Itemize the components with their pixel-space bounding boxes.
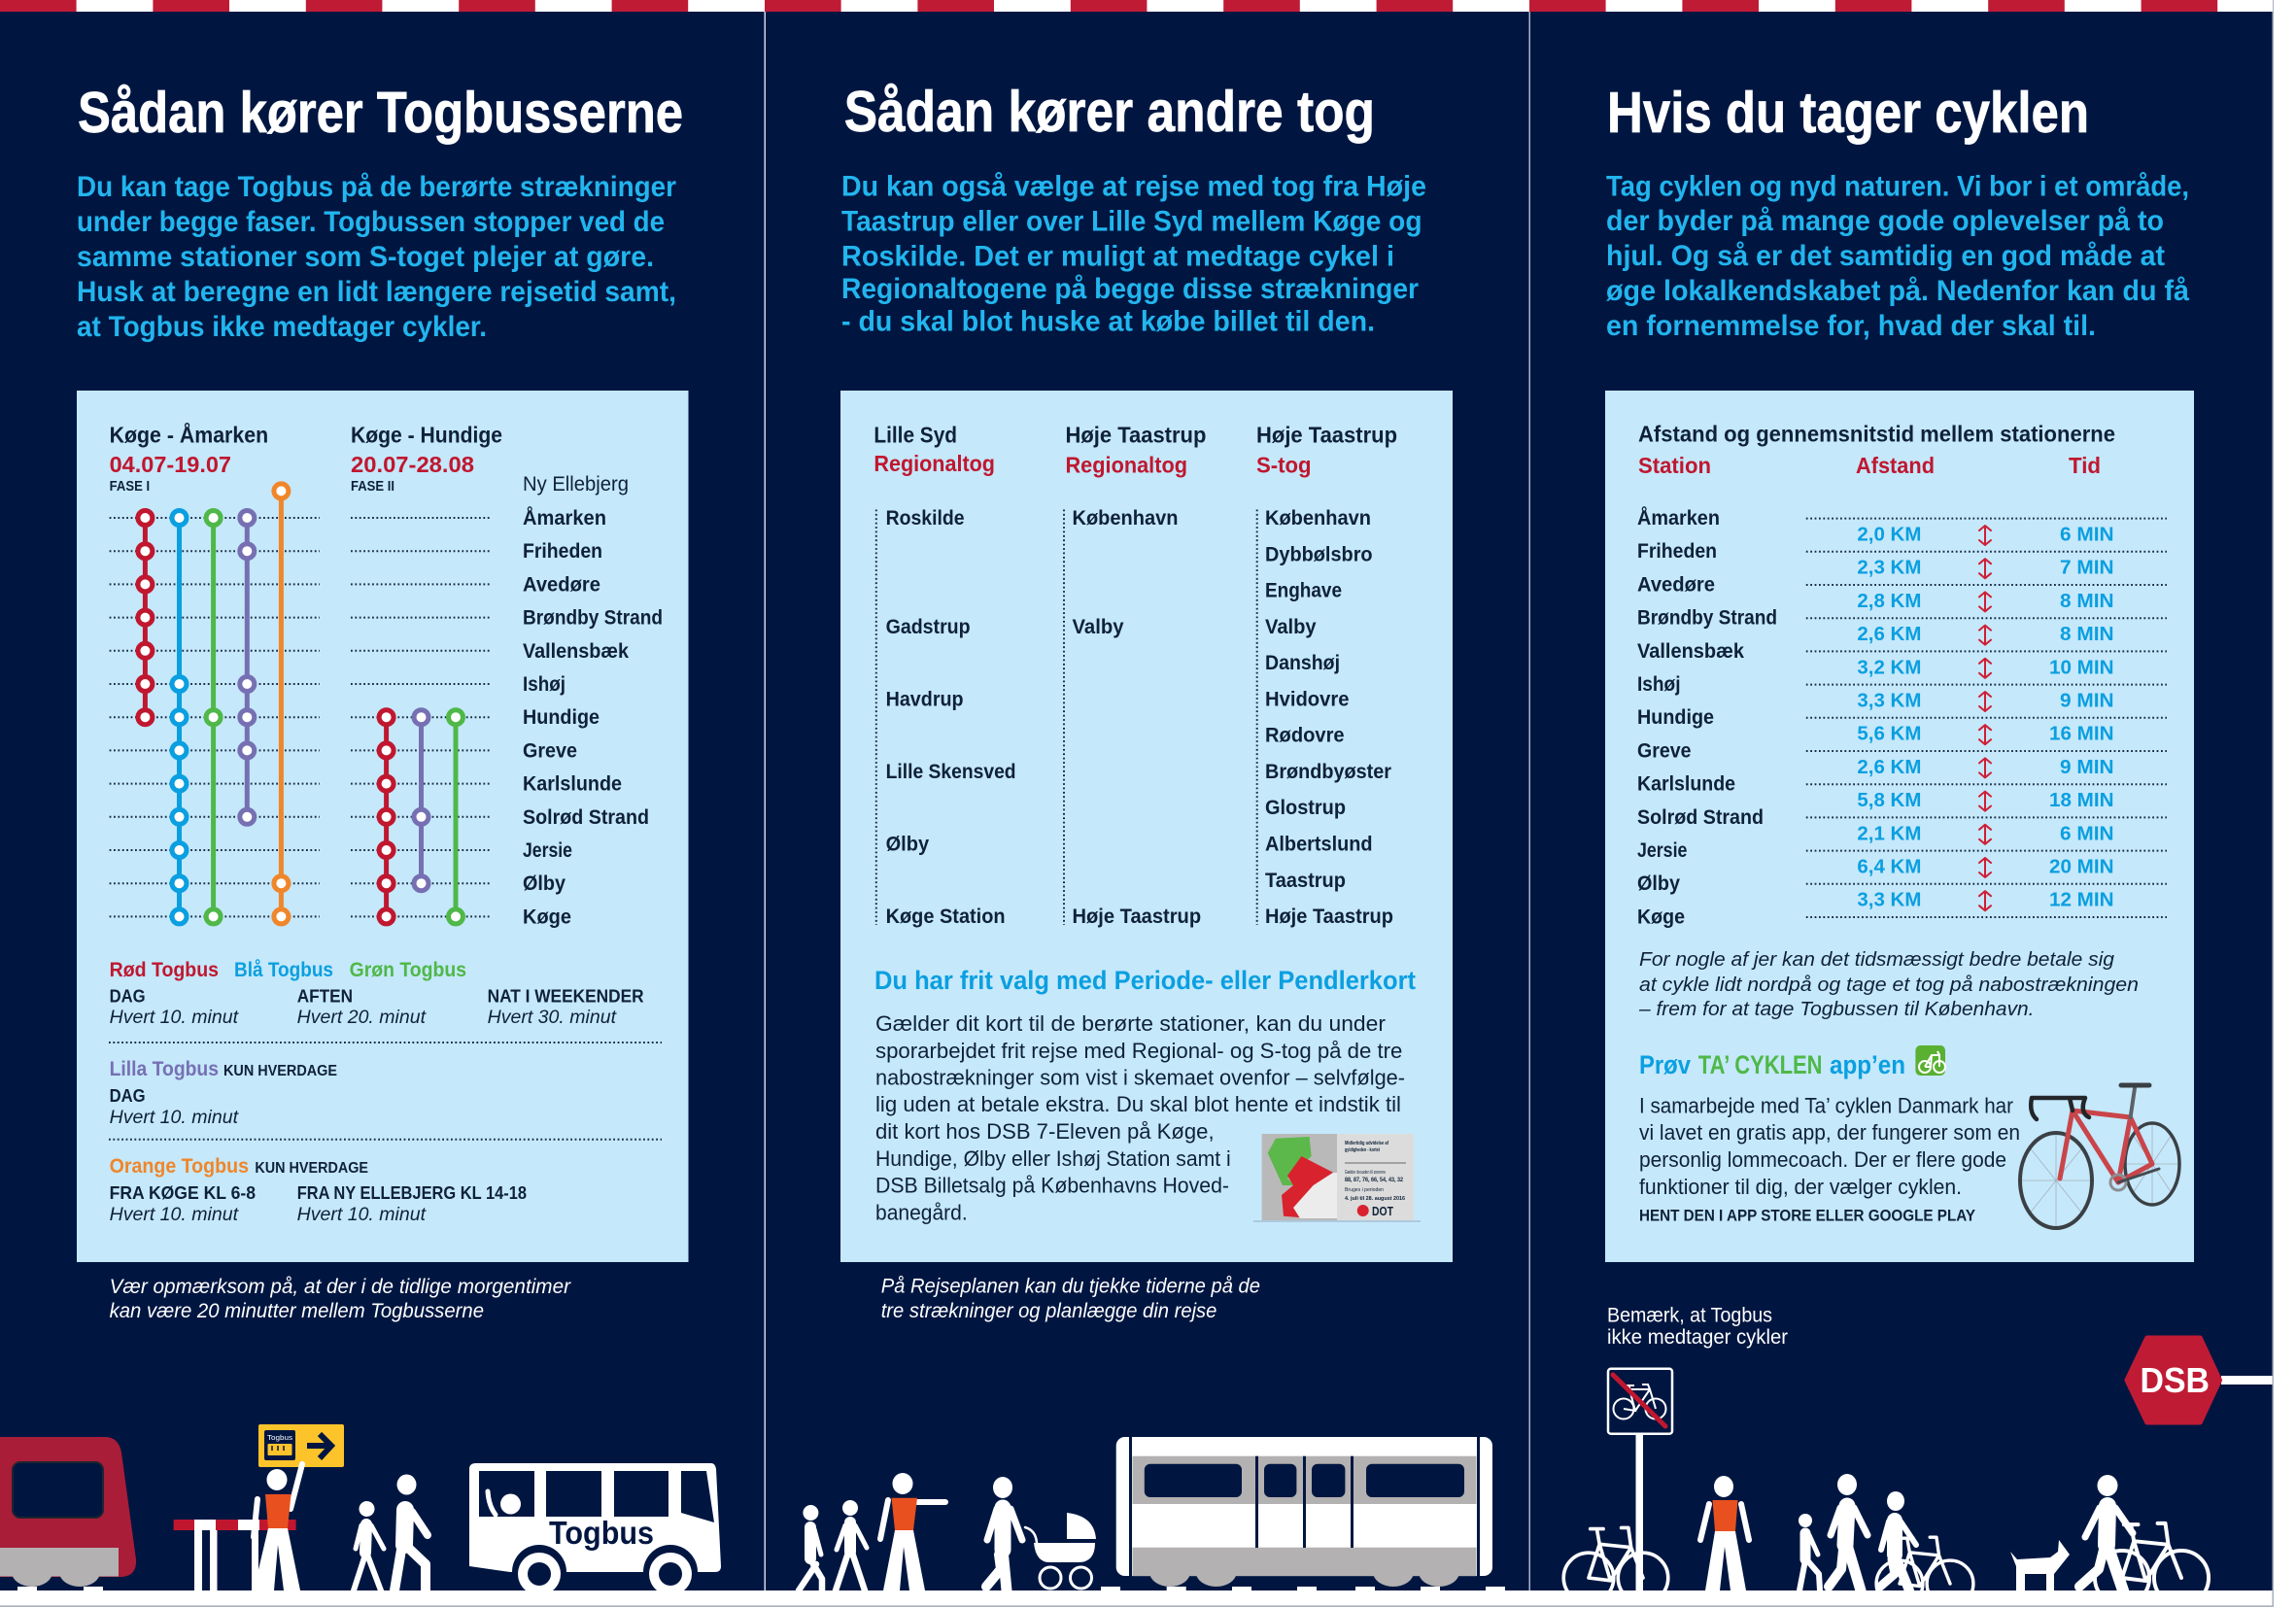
station names: Avedøre xyxy=(523,573,600,596)
legend: purple Togbus: DAG xyxy=(110,1086,146,1106)
note: early morning departures: kan være 20 minutter mellem Togbusserne xyxy=(110,1300,484,1322)
route headings: 20.07-28.08 xyxy=(351,452,474,477)
legend: orange Togbus: FRA NY ELLEBJERG KL 14-18 xyxy=(297,1183,527,1203)
image: commuter card insert with zone map xyxy=(1253,1134,1421,1222)
route headings xyxy=(110,422,502,495)
distance values: 2,3 KM xyxy=(1857,558,1921,579)
time values: 18 MIN xyxy=(2049,790,2114,811)
time values: 6 MIN xyxy=(2060,823,2114,844)
station column: Karlslunde xyxy=(1637,773,1735,796)
intro text: panel 2: Du kan også vælge at rejse med tog fra Høje xyxy=(841,171,1426,203)
station column: Solrød Strand xyxy=(1637,806,1764,829)
Høje Taastrup S-tog stations: Enghave xyxy=(1265,579,1342,602)
legend: orange Togbus: Hvert 10. minut xyxy=(110,1205,239,1225)
distance values: 2,6 KM xyxy=(1857,624,1921,645)
purple line phase II xyxy=(414,710,428,891)
station column: Køge xyxy=(1637,906,1685,928)
top stripe: red and white rail pattern xyxy=(0,0,2273,12)
image: commuter card insert with zone map: Gælder desuden til zonerne xyxy=(1345,1170,1386,1176)
station names: Ølby xyxy=(523,872,565,895)
subheading: Periode- eller Pendlerkort: Du har frit valg med Periode- eller Pendlerkort xyxy=(874,966,1416,995)
figure: guide in vest pointing at sign xyxy=(254,1464,302,1590)
intro text: panel 1 xyxy=(77,171,676,343)
distance values: 3,3 KM xyxy=(1857,890,1921,911)
Høje Taastrup S-tog stations: København xyxy=(1265,507,1371,530)
image: commuter card insert with zone map: Midlertidig udvidelse af xyxy=(1345,1141,1388,1146)
Lille Syd regional stations: Roskilde xyxy=(886,507,965,530)
intro text: panel 2: Roskilde. Det er muligt at medtage cykel i xyxy=(841,240,1394,272)
illustration: Togbus bus: Togbus xyxy=(549,1515,654,1551)
station column: Hundige xyxy=(1637,706,1714,729)
column headers xyxy=(874,422,1397,478)
note: early morning departures xyxy=(110,1276,571,1322)
panel: cycling distances xyxy=(1605,391,2194,1262)
station column: Ishøj xyxy=(1637,673,1681,696)
green line phase I xyxy=(206,511,221,924)
image: commuter card insert with zone map: 4. juli til 28. august 2016 xyxy=(1345,1196,1405,1202)
Høje Taastrup S-tog stations: Albertslund xyxy=(1265,834,1373,855)
green line phase II xyxy=(449,710,463,924)
time values: 9 MIN xyxy=(2060,757,2114,778)
column headers: Lille Syd xyxy=(874,422,957,447)
legend: red, blue and green Togbus: Hvert 30. minut xyxy=(488,1008,617,1028)
illustration: S-train carriage xyxy=(1101,1437,1505,1591)
body text: card information: dit kort hos DSB 7-Eleven på Køge, xyxy=(875,1119,1215,1144)
subheading: Prøv TA' CYKLEN app'en: TA’ CYKLEN xyxy=(1698,1050,1823,1079)
intro text: panel 3: en fornemmelse for, hvad der skal til. xyxy=(1606,310,2096,342)
body text: app description xyxy=(1639,1094,2020,1225)
column headers: S-tog xyxy=(1256,453,1312,478)
note: Rejseplanen: På Rejseplanen kan du tjekke tiderne på de xyxy=(881,1276,1260,1298)
Høje Taastrup regional stations: København xyxy=(1073,507,1178,530)
image: red road bicycle xyxy=(2018,1085,2179,1229)
legend: red, blue and green Togbus: DAG xyxy=(110,987,146,1007)
icon: no bicycles sign on pole with parked bike xyxy=(1563,1369,1672,1603)
image: commuter card insert with zone map: 88, 87, 76, 66, 54, 43, 32 xyxy=(1345,1178,1404,1183)
station names: Vallensbæk xyxy=(523,640,629,663)
route headings: FASE I xyxy=(110,479,150,495)
legend: red, blue and green Togbus: NAT I WEEKENDER xyxy=(488,987,644,1007)
legend: orange Togbus: Orange Togbus xyxy=(110,1154,249,1178)
figures: child and adult walking xyxy=(354,1475,428,1590)
italic cycling tip: For nogle af jer kan det tidsmæssigt bedre betale sig xyxy=(1639,949,2114,971)
italic cycling tip: at cykle lidt nordpå og tage et tog på nabostrækningen xyxy=(1639,974,2139,996)
body text: app description: funktioner til dig, der vælger cyklen. xyxy=(1639,1175,1962,1199)
figure: guide in vest pointing toward train xyxy=(880,1473,945,1590)
Høje Taastrup S-tog stations: Valby xyxy=(1265,616,1317,638)
time values: 12 MIN xyxy=(2049,890,2114,911)
station column: Brøndby Strand xyxy=(1637,607,1777,630)
italic cycling tip xyxy=(1638,949,2139,1020)
station names: Åmarken xyxy=(523,506,606,530)
distance values: 2,1 KM xyxy=(1857,823,1921,844)
route headings: Køge - Åmarken xyxy=(110,422,268,447)
distance values: 3,3 KM xyxy=(1857,690,1921,711)
italic cycling tip: – frem for at tage Togbussen til København. xyxy=(1638,999,2035,1020)
icon: Ta' cyklen app xyxy=(1915,1045,1945,1076)
Høje Taastrup S-tog stations: Taastrup xyxy=(1265,870,1346,892)
intro text: panel 2: Taastrup eller over Lille Syd mellem Køge og xyxy=(841,206,1422,238)
intro text: panel 1: samme stationer som S-toget plejer at gøre. xyxy=(77,241,654,273)
station column: Greve xyxy=(1637,739,1691,762)
intro text: panel 1: at Togbus ikke medtager cykler. xyxy=(77,311,487,343)
figures: family walking with bicycle xyxy=(1799,1474,1973,1607)
body text: card information: Hundige, Ølby eller Ishøj Station samt i xyxy=(875,1146,1231,1171)
legend: purple Togbus: KUN HVERDAGE xyxy=(223,1063,337,1079)
intro text: panel 3 xyxy=(1606,171,2190,342)
time values: 20 MIN xyxy=(2049,857,2114,878)
legend: red, blue and green Togbus: AFTEN xyxy=(297,987,353,1007)
note: Togbus does not carry bikes xyxy=(1607,1305,1788,1349)
intro text: panel 2: Regionaltogene på begge disse strækninger xyxy=(841,273,1419,305)
ground: white platform xyxy=(0,1590,2274,1607)
distance values: 5,6 KM xyxy=(1857,724,1921,745)
body text: app description: I samarbejde med Ta’ cyklen Danmark har xyxy=(1639,1094,2013,1118)
column headers: Regionaltog xyxy=(1065,453,1187,478)
image: commuter card insert with zone map: DOT xyxy=(1372,1204,1393,1218)
body text: card information: Gælder dit kort til de berørte stationer, kan du under xyxy=(875,1011,1386,1036)
station column: Avedøre xyxy=(1637,573,1715,596)
legend: red, blue and green Togbus: Hvert 20. minut xyxy=(297,1008,427,1028)
table rows dotted xyxy=(1806,519,2167,917)
body text: app description: HENT DEN I APP STORE ELLER GOOGLE PLAY xyxy=(1639,1208,1975,1225)
divider dots xyxy=(109,1043,662,1140)
distance values: 2,6 KM xyxy=(1857,757,1921,778)
panel: Togbus route map and schedule xyxy=(77,391,688,1262)
table heading: Station xyxy=(1638,453,1711,478)
vertical dotted route lines xyxy=(876,509,1257,925)
orange line phase I xyxy=(274,484,289,924)
legend: red, blue and green Togbus: Hvert 10. minut xyxy=(110,1008,239,1028)
route headings: 04.07-19.07 xyxy=(110,452,231,477)
subheading: Prøv TA' CYKLEN app'en: app’en xyxy=(1830,1050,1905,1079)
legend: purple Togbus: Hvert 10. minut xyxy=(110,1108,239,1128)
legend: purple Togbus xyxy=(110,1057,337,1128)
table heading: Tid xyxy=(2069,453,2101,478)
body text: card information: lig uden at betale ekstra. Du skal blot hente et indstik til xyxy=(875,1092,1401,1116)
logo: DSB xyxy=(2128,1339,2272,1422)
time values: 8 MIN xyxy=(2060,591,2114,612)
body text: card information: banegård. xyxy=(875,1200,968,1224)
time values: 8 MIN xyxy=(2060,624,2114,645)
table heading: Afstand xyxy=(1856,453,1935,478)
subheading: Prøv TA' CYKLEN app'en xyxy=(1639,1050,1905,1079)
Lille Syd regional stations: Gadstrup xyxy=(886,616,971,638)
station names: Køge xyxy=(523,906,571,928)
panel: alternative trains xyxy=(840,391,1453,1262)
Høje Taastrup S-tog stations: Danshøj xyxy=(1265,652,1340,674)
illustration: red train xyxy=(0,1437,136,1591)
route headings: FASE II xyxy=(351,479,394,495)
intro text: panel 3: Tag cyklen og nyd naturen. Vi bor i et område, xyxy=(1606,171,2189,203)
column headers: Høje Taastrup xyxy=(1256,422,1397,447)
station column: Åmarken xyxy=(1637,506,1720,530)
station names xyxy=(523,473,663,928)
table heading xyxy=(1638,422,2115,478)
Lille Syd regional stations: Lille Skensved xyxy=(886,761,1016,783)
intro text: panel 1: Husk at beregne en lidt længere rejsetid samt, xyxy=(77,276,676,308)
legend: red, blue and green Togbus xyxy=(110,958,644,1028)
heading: Sådan kører Togbusserne: Sådan kører Togbusserne xyxy=(78,81,683,145)
figure: guide in vest xyxy=(1700,1476,1749,1590)
logo: DSB: DSB xyxy=(2140,1360,2210,1400)
Høje Taastrup regional stations: Høje Taastrup xyxy=(1073,906,1201,928)
body text: card information xyxy=(875,1011,1405,1224)
station names: Brøndby Strand xyxy=(523,607,663,630)
Lille Syd regional stations: Køge Station xyxy=(886,906,1006,928)
route lines: phase I xyxy=(138,484,289,924)
legend: orange Togbus: FRA KØGE KL 6-8 xyxy=(110,1183,256,1203)
heading: Sådan kører andre tog: Sådan kører andre tog xyxy=(844,80,1375,144)
red line phase II xyxy=(379,710,394,924)
table heading: Afstand og gennemsnitstid mellem stationerne xyxy=(1638,422,2115,447)
body text: card information: DSB Billetsalg på Københavns Hoved- xyxy=(875,1174,1229,1198)
distance values: 2,0 KM xyxy=(1857,525,1921,546)
intro text: panel 2: - du skal blot huske at købe billet til den. xyxy=(841,306,1375,338)
station column: Ølby xyxy=(1637,872,1680,895)
time values: 7 MIN xyxy=(2060,558,2114,579)
legend: red, blue and green Togbus: Grøn Togbus xyxy=(350,958,466,981)
legend: red, blue and green Togbus: Rød Togbus xyxy=(110,958,219,981)
intro text: panel 3: øge lokalkendskabet på. Nedenfor kan du få xyxy=(1606,275,2190,307)
legend: orange Togbus: KUN HVERDAGE xyxy=(255,1160,368,1177)
figure: dog xyxy=(2010,1540,2070,1590)
station names: Ishøj xyxy=(523,673,565,696)
figure: parent with pram xyxy=(986,1477,1096,1590)
Høje Taastrup S-tog stations: Høje Taastrup xyxy=(1265,906,1393,928)
station column xyxy=(1637,506,1777,928)
route headings: Køge - Hundige xyxy=(351,422,502,447)
Høje Taastrup S-tog stations: Brøndbyøster xyxy=(1265,761,1391,783)
Høje Taastrup regional stations xyxy=(1073,507,1201,928)
legend: orange Togbus: Hvert 10. minut xyxy=(297,1205,427,1225)
note: Togbus does not carry bikes: ikke medtager cykler xyxy=(1607,1326,1788,1349)
blue line phase I xyxy=(172,511,187,924)
note: early morning departures: Vær opmærksom på, at der i de tidlige morgentimer xyxy=(110,1276,571,1298)
station names: Greve xyxy=(523,739,577,762)
Høje Taastrup S-tog stations: Dybbølsbro xyxy=(1265,543,1373,565)
station column: Vallensbæk xyxy=(1637,640,1744,663)
distance values: 6,4 KM xyxy=(1857,857,1921,878)
note: Rejseplanen xyxy=(881,1276,1260,1322)
station names: Ny Ellebjerg xyxy=(523,473,629,496)
intro text: panel 2 xyxy=(841,171,1426,338)
body text: card information: nabostrækninger som vist i skemaet ovenfor – selvfølge- xyxy=(875,1066,1405,1090)
illustration: Togbus bus xyxy=(469,1463,721,1599)
purple line phase I xyxy=(240,511,255,824)
legend: red, blue and green Togbus: Blå Togbus xyxy=(234,958,333,981)
Høje Taastrup S-tog stations: Rødovre xyxy=(1265,725,1345,747)
distance values xyxy=(1857,525,1921,911)
time values: 9 MIN xyxy=(2060,690,2114,711)
body text: app description: vi lavet en gratis app, der fungerer som en xyxy=(1639,1120,2020,1145)
column headers: Regionaltog xyxy=(874,451,995,476)
intro text: panel 1: Du kan tage Togbus på de berørte strækninger xyxy=(77,171,676,203)
Høje Taastrup S-tog stations xyxy=(1265,507,1393,928)
red line phase I xyxy=(138,511,153,725)
note: Togbus does not carry bikes: Bemærk, at Togbus xyxy=(1607,1305,1772,1327)
intro text: panel 3: der byder på mange gode oplevelser på to xyxy=(1606,205,2164,237)
station names: Hundige xyxy=(523,706,600,729)
distance values: 2,8 KM xyxy=(1857,591,1921,612)
legend: purple Togbus: Lilla Togbus xyxy=(110,1057,219,1080)
Høje Taastrup S-tog stations: Hvidovre xyxy=(1265,688,1349,710)
distance values: 5,8 KM xyxy=(1857,790,1921,811)
illustration: barrier xyxy=(174,1520,296,1590)
body text: app description: personlig lommecoach. Der er flere gode xyxy=(1639,1147,2006,1172)
legend: orange Togbus xyxy=(110,1154,527,1225)
Høje Taastrup S-tog stations: Glostrup xyxy=(1265,797,1346,819)
distance values: 3,2 KM xyxy=(1857,657,1921,678)
double arrows between stations xyxy=(1979,526,1991,910)
station column: Jersie xyxy=(1637,839,1687,862)
route lines: phase II xyxy=(379,710,463,924)
column headers: Høje Taastrup xyxy=(1065,422,1206,447)
icon: yellow Togbus direction sign: Togbus xyxy=(267,1433,292,1442)
station names: Karlslunde xyxy=(523,773,622,796)
intro text: panel 1: under begge faser. Togbussen stopper ved de xyxy=(77,206,665,238)
Lille Syd regional stations xyxy=(886,507,1016,928)
dotted station rows xyxy=(110,518,492,916)
station names: Jersie xyxy=(523,839,572,862)
station column: Friheden xyxy=(1637,540,1717,563)
time values: 10 MIN xyxy=(2049,657,2114,678)
image: commuter card insert with zone map: Bruges i perioden xyxy=(1345,1187,1384,1193)
figure: person walking bicycle xyxy=(2079,1475,2209,1605)
heading: Hvis du tager cyklen: Hvis du tager cyklen xyxy=(1607,81,2089,145)
note: Rejseplanen: tre strækninger og planlægge din rejse xyxy=(881,1300,1217,1322)
Høje Taastrup regional stations: Valby xyxy=(1073,616,1124,638)
intro text: panel 3: hjul. Og så er det samtidig en god måde at xyxy=(1606,240,2165,272)
station names: Friheden xyxy=(523,540,602,563)
station names: Solrød Strand xyxy=(523,806,649,829)
time values: 6 MIN xyxy=(2060,525,2114,546)
figures: two children xyxy=(799,1500,867,1590)
Lille Syd regional stations: Havdrup xyxy=(886,688,964,710)
body text: card information: sporarbejdet frit rejse med Regional- og S-tog på de tre xyxy=(875,1039,1402,1063)
time values xyxy=(2049,525,2114,911)
image: commuter card insert with zone map: gyldigheden - kortet xyxy=(1345,1147,1380,1153)
icon: yellow Togbus direction sign xyxy=(258,1424,344,1467)
Lille Syd regional stations: Ølby xyxy=(886,834,929,856)
subheading: Prøv TA' CYKLEN app'en: Prøv xyxy=(1639,1050,1691,1079)
time values: 16 MIN xyxy=(2049,724,2114,745)
